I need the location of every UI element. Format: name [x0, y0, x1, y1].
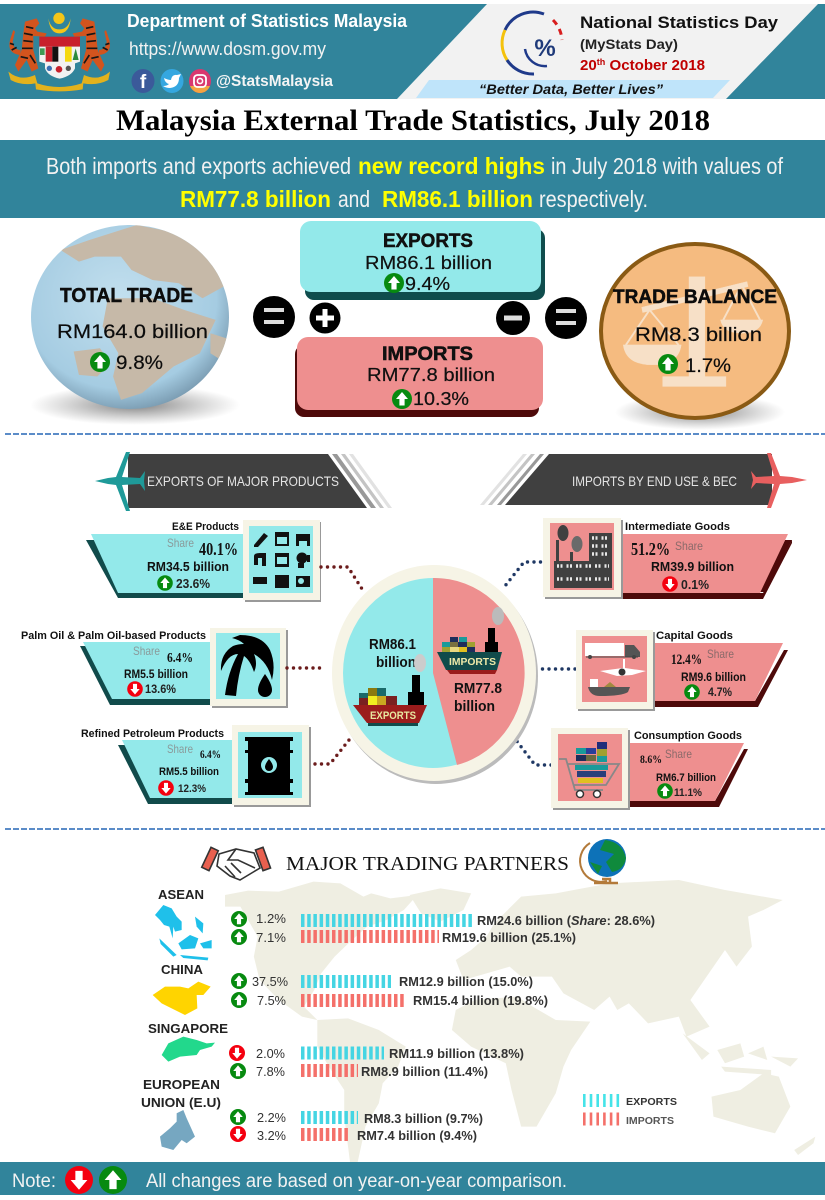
consumption change: [657, 783, 702, 799]
headline line 2: and: [338, 186, 370, 212]
China export row: [231, 973, 533, 989]
panel: E&E products: [86, 520, 321, 602]
minus icon: [496, 301, 530, 335]
world map background: [225, 880, 815, 1162]
Singapore export row: 2.0%: [256, 1046, 285, 1061]
icon: facebook: [132, 69, 154, 93]
equals icon: [545, 297, 587, 339]
refined petroleum change: 12.3%: [178, 783, 206, 795]
Singapore label: SINGAPORE: [148, 1021, 228, 1036]
headline line 2: [180, 186, 648, 212]
panel: exports: [300, 221, 545, 300]
partner: ASEAN: [155, 887, 655, 960]
website: https://www.dosm.gov.my: [129, 39, 326, 59]
refined petroleum share: 6.4%: [200, 747, 221, 761]
panel: national statistics day: [397, 4, 818, 99]
headline line 2: RM77.8 billion: [180, 186, 331, 212]
icon: handshake: [202, 847, 271, 880]
note label: Note:: [12, 1171, 56, 1192]
exports change: [384, 273, 450, 294]
consumption share: Share: [665, 747, 692, 761]
consumption title: Consumption Goods: [634, 730, 742, 742]
panel: trade balance: [601, 244, 789, 430]
imports value: [454, 680, 502, 715]
icon: ASEAN map: [155, 905, 212, 960]
pie chart: [332, 565, 538, 784]
exports value: RM86.1: [369, 636, 416, 653]
intermediate share: [631, 539, 703, 559]
E&E change: [157, 575, 210, 591]
palm oil title: Palm Oil & Palm Oil-based Products: [21, 630, 206, 642]
icon: oil barrel: [245, 737, 293, 795]
ASEAN label: ASEAN: [158, 887, 204, 902]
percent sign: %: [534, 35, 556, 62]
panel: intermediate goods: [543, 518, 792, 599]
capital share: Share: [707, 647, 734, 661]
connector: exports dots: [287, 567, 364, 764]
Singapore import row: [230, 1063, 488, 1079]
icon: twitter: [160, 69, 184, 93]
icon: China map: [153, 982, 211, 1015]
E&E change: 23.6%: [176, 576, 210, 591]
total trade change: [90, 352, 163, 374]
panel: palm oil: [21, 628, 288, 708]
headline line 1: in July 2018 with values of: [551, 153, 784, 179]
total trade value: RM164.0 billion: [57, 322, 208, 343]
exports value: billion: [376, 654, 416, 671]
intermediate change: 0.1%: [681, 577, 709, 592]
exports heading: EXPORTS: [383, 231, 473, 252]
headline line 1: Both imports and exports achieved: [46, 153, 351, 179]
palm oil share: Share: [133, 644, 160, 658]
banner: exports of major products: [95, 452, 392, 511]
capital share: 12.4%: [671, 652, 702, 668]
icon: EU map: [160, 1110, 195, 1150]
headline banner: [0, 140, 825, 218]
ASEAN export row: [231, 911, 655, 928]
icon: exports ship: EXPORTS: [370, 710, 416, 722]
Singapore export row: [229, 1045, 524, 1061]
note text: All changes are based on year-on-year comparison.: [146, 1171, 567, 1192]
panel: capital goods: [576, 630, 788, 711]
legend: EXPORTS: [626, 1097, 677, 1108]
E&E share: Share: [167, 536, 194, 550]
equals icon: [253, 296, 295, 338]
note bar: [0, 1162, 825, 1195]
EU export row: [230, 1109, 483, 1126]
refined petroleum change: [158, 780, 206, 796]
exports value: [369, 636, 416, 671]
imports change: 10.3%: [413, 389, 469, 409]
E&E share: 40.1%: [199, 539, 238, 559]
capital share: [671, 647, 734, 668]
palm oil value: RM5.5 billion: [124, 667, 188, 681]
icon: factory: [554, 525, 612, 588]
E&E title: E&E Products: [172, 521, 239, 533]
ASEAN export row: RM24.6 billion (Share: 28.6%): [477, 913, 655, 928]
headline line 1: new record highs: [358, 153, 545, 179]
partner: Singapore: [148, 1021, 524, 1079]
EU import row: 3.2%: [257, 1128, 286, 1143]
E&E value: RM34.5 billion: [147, 559, 229, 574]
slogan: “Better Data, Better Lives”: [479, 81, 663, 97]
imports value: RM77.8: [454, 680, 502, 697]
intermediate share: Share: [675, 539, 703, 553]
Singapore export row: RM11.9 billion (13.8%): [389, 1046, 524, 1061]
coat of arms: [8, 13, 110, 91]
palm oil change: [127, 681, 176, 697]
legend: IMPORTS: [626, 1116, 674, 1127]
palm oil share: [133, 644, 193, 666]
EU label: UNION (E.U): [141, 1095, 221, 1110]
section title: MAJOR TRADING PARTNERS: [286, 853, 569, 875]
heading: major trading partners: [202, 839, 626, 883]
China import row: RM15.4 billion (19.8%): [413, 993, 548, 1008]
Singapore import row: 7.8%: [256, 1064, 285, 1079]
capital title: Capital Goods: [656, 630, 733, 642]
title: Malaysia External Trade Statistics, July 2018: [116, 104, 710, 137]
imports value: RM77.8 billion: [367, 365, 495, 385]
trade balance value: RM8.3 billion: [635, 325, 762, 346]
icon: down arrow: [65, 1166, 93, 1194]
intermediate title: Intermediate Goods: [625, 521, 730, 533]
total trade change: 9.8%: [116, 353, 163, 374]
consumption value: RM6.7 billion: [656, 772, 716, 784]
imports value: billion: [454, 698, 495, 715]
event date: October 2018: [605, 57, 705, 74]
headline line 1: [46, 153, 784, 179]
icon: exports ship: [353, 654, 427, 726]
consumption share: 8.6%: [640, 752, 662, 766]
organisation name: Department of Statistics Malaysia: [127, 11, 408, 31]
icon: mystats logo: [502, 12, 562, 74]
trade balance heading: TRADE BALANCE: [613, 287, 777, 308]
exports change: 9.4%: [405, 274, 450, 294]
China export row: RM12.9 billion (15.0%): [399, 974, 533, 989]
ASEAN import row: 7.1%: [256, 930, 286, 945]
intermediate change: [662, 576, 709, 592]
partner: European Union: [141, 1077, 483, 1150]
legend: [583, 1097, 677, 1127]
panel: imports: [295, 337, 543, 417]
refined petroleum title: Refined Petroleum Products: [81, 728, 224, 740]
EU export row: RM8.3 billion (9.7%): [364, 1111, 483, 1126]
imports heading: IMPORTS: [382, 344, 473, 365]
ASEAN import row: RM19.6 billion (25.1%): [442, 930, 576, 945]
exports banner label: EXPORTS OF MAJOR PRODUCTS: [147, 473, 339, 489]
event name: National Statistics Day: [580, 13, 779, 32]
plus icon: [310, 302, 340, 334]
China label: CHINA: [161, 962, 204, 977]
ASEAN export row: 1.2%: [256, 911, 286, 926]
intermediate value: RM39.9 billion: [651, 559, 734, 574]
China import row: 7.5%: [257, 993, 286, 1008]
event date: 20: [580, 57, 597, 74]
capital value: RM9.6 billion: [681, 670, 746, 684]
trade balance change: [658, 354, 731, 377]
icon: shopping cart: [559, 742, 619, 798]
palm oil change: 13.6%: [145, 682, 176, 696]
imports banner label: IMPORTS BY END USE & BEC: [572, 473, 737, 489]
consumption change: 11.1%: [674, 787, 702, 799]
icon: imports ship: IMPORTS: [449, 656, 496, 668]
icon: teal plane: [95, 452, 145, 511]
panel: consumption goods: [551, 728, 748, 810]
Singapore import row: RM8.9 billion (11.4%): [361, 1064, 488, 1079]
icon: palm tree and oil drop: [221, 635, 274, 697]
icon: imports ship: [437, 607, 504, 674]
EU export row: 2.2%: [257, 1110, 286, 1125]
EU import row: [230, 1126, 477, 1143]
panel: refined petroleum: [81, 725, 311, 807]
icon: up arrow: [99, 1166, 127, 1194]
capital change: 4.7%: [708, 685, 732, 699]
icon: red plane: [751, 453, 807, 508]
headline line 2: respectively.: [539, 186, 648, 212]
EU import row: RM7.4 billion (9.4%): [357, 1128, 477, 1143]
trade balance change: 1.7%: [685, 356, 731, 377]
event sub name: (MyStats Day): [580, 36, 678, 52]
header band: [0, 4, 825, 99]
E&E share: [167, 536, 238, 559]
palm oil share: 6.4%: [167, 651, 193, 666]
panel: total trade globe: [30, 225, 240, 425]
intermediate share: 51.2%: [631, 539, 670, 559]
icon: electronics grid: [253, 532, 310, 588]
ASEAN import row: [231, 929, 576, 945]
partner: China: [153, 962, 548, 1015]
capital change: [684, 684, 732, 700]
China export row: 37.5%: [252, 974, 288, 989]
total trade heading: TOTAL TRADE: [60, 285, 193, 307]
social handle: @StatsMalaysia: [216, 73, 333, 90]
icon: scales: [623, 277, 763, 386]
EU label: EUROPEAN: [143, 1077, 220, 1092]
refined petroleum share: [167, 742, 221, 761]
EU label: [141, 1077, 221, 1110]
icon: Singapore map: [162, 1037, 215, 1062]
banner: imports by end use: [480, 453, 807, 508]
refined petroleum share: Share: [167, 742, 193, 756]
consumption share: [640, 747, 692, 766]
headline line 2: RM86.1 billion: [382, 186, 533, 212]
connector: imports dots: [505, 562, 575, 765]
icon: desk globe: [580, 839, 626, 883]
refined petroleum value: RM5.5 billion: [159, 766, 219, 778]
icon: instagram: [189, 69, 211, 93]
exports value: RM86.1 billion: [365, 253, 492, 273]
imports change: [392, 389, 469, 409]
icon: truck plane ship: [585, 643, 646, 696]
event date: th: [597, 57, 605, 67]
icon: facebook: f: [140, 72, 147, 93]
China import row: [231, 992, 548, 1008]
